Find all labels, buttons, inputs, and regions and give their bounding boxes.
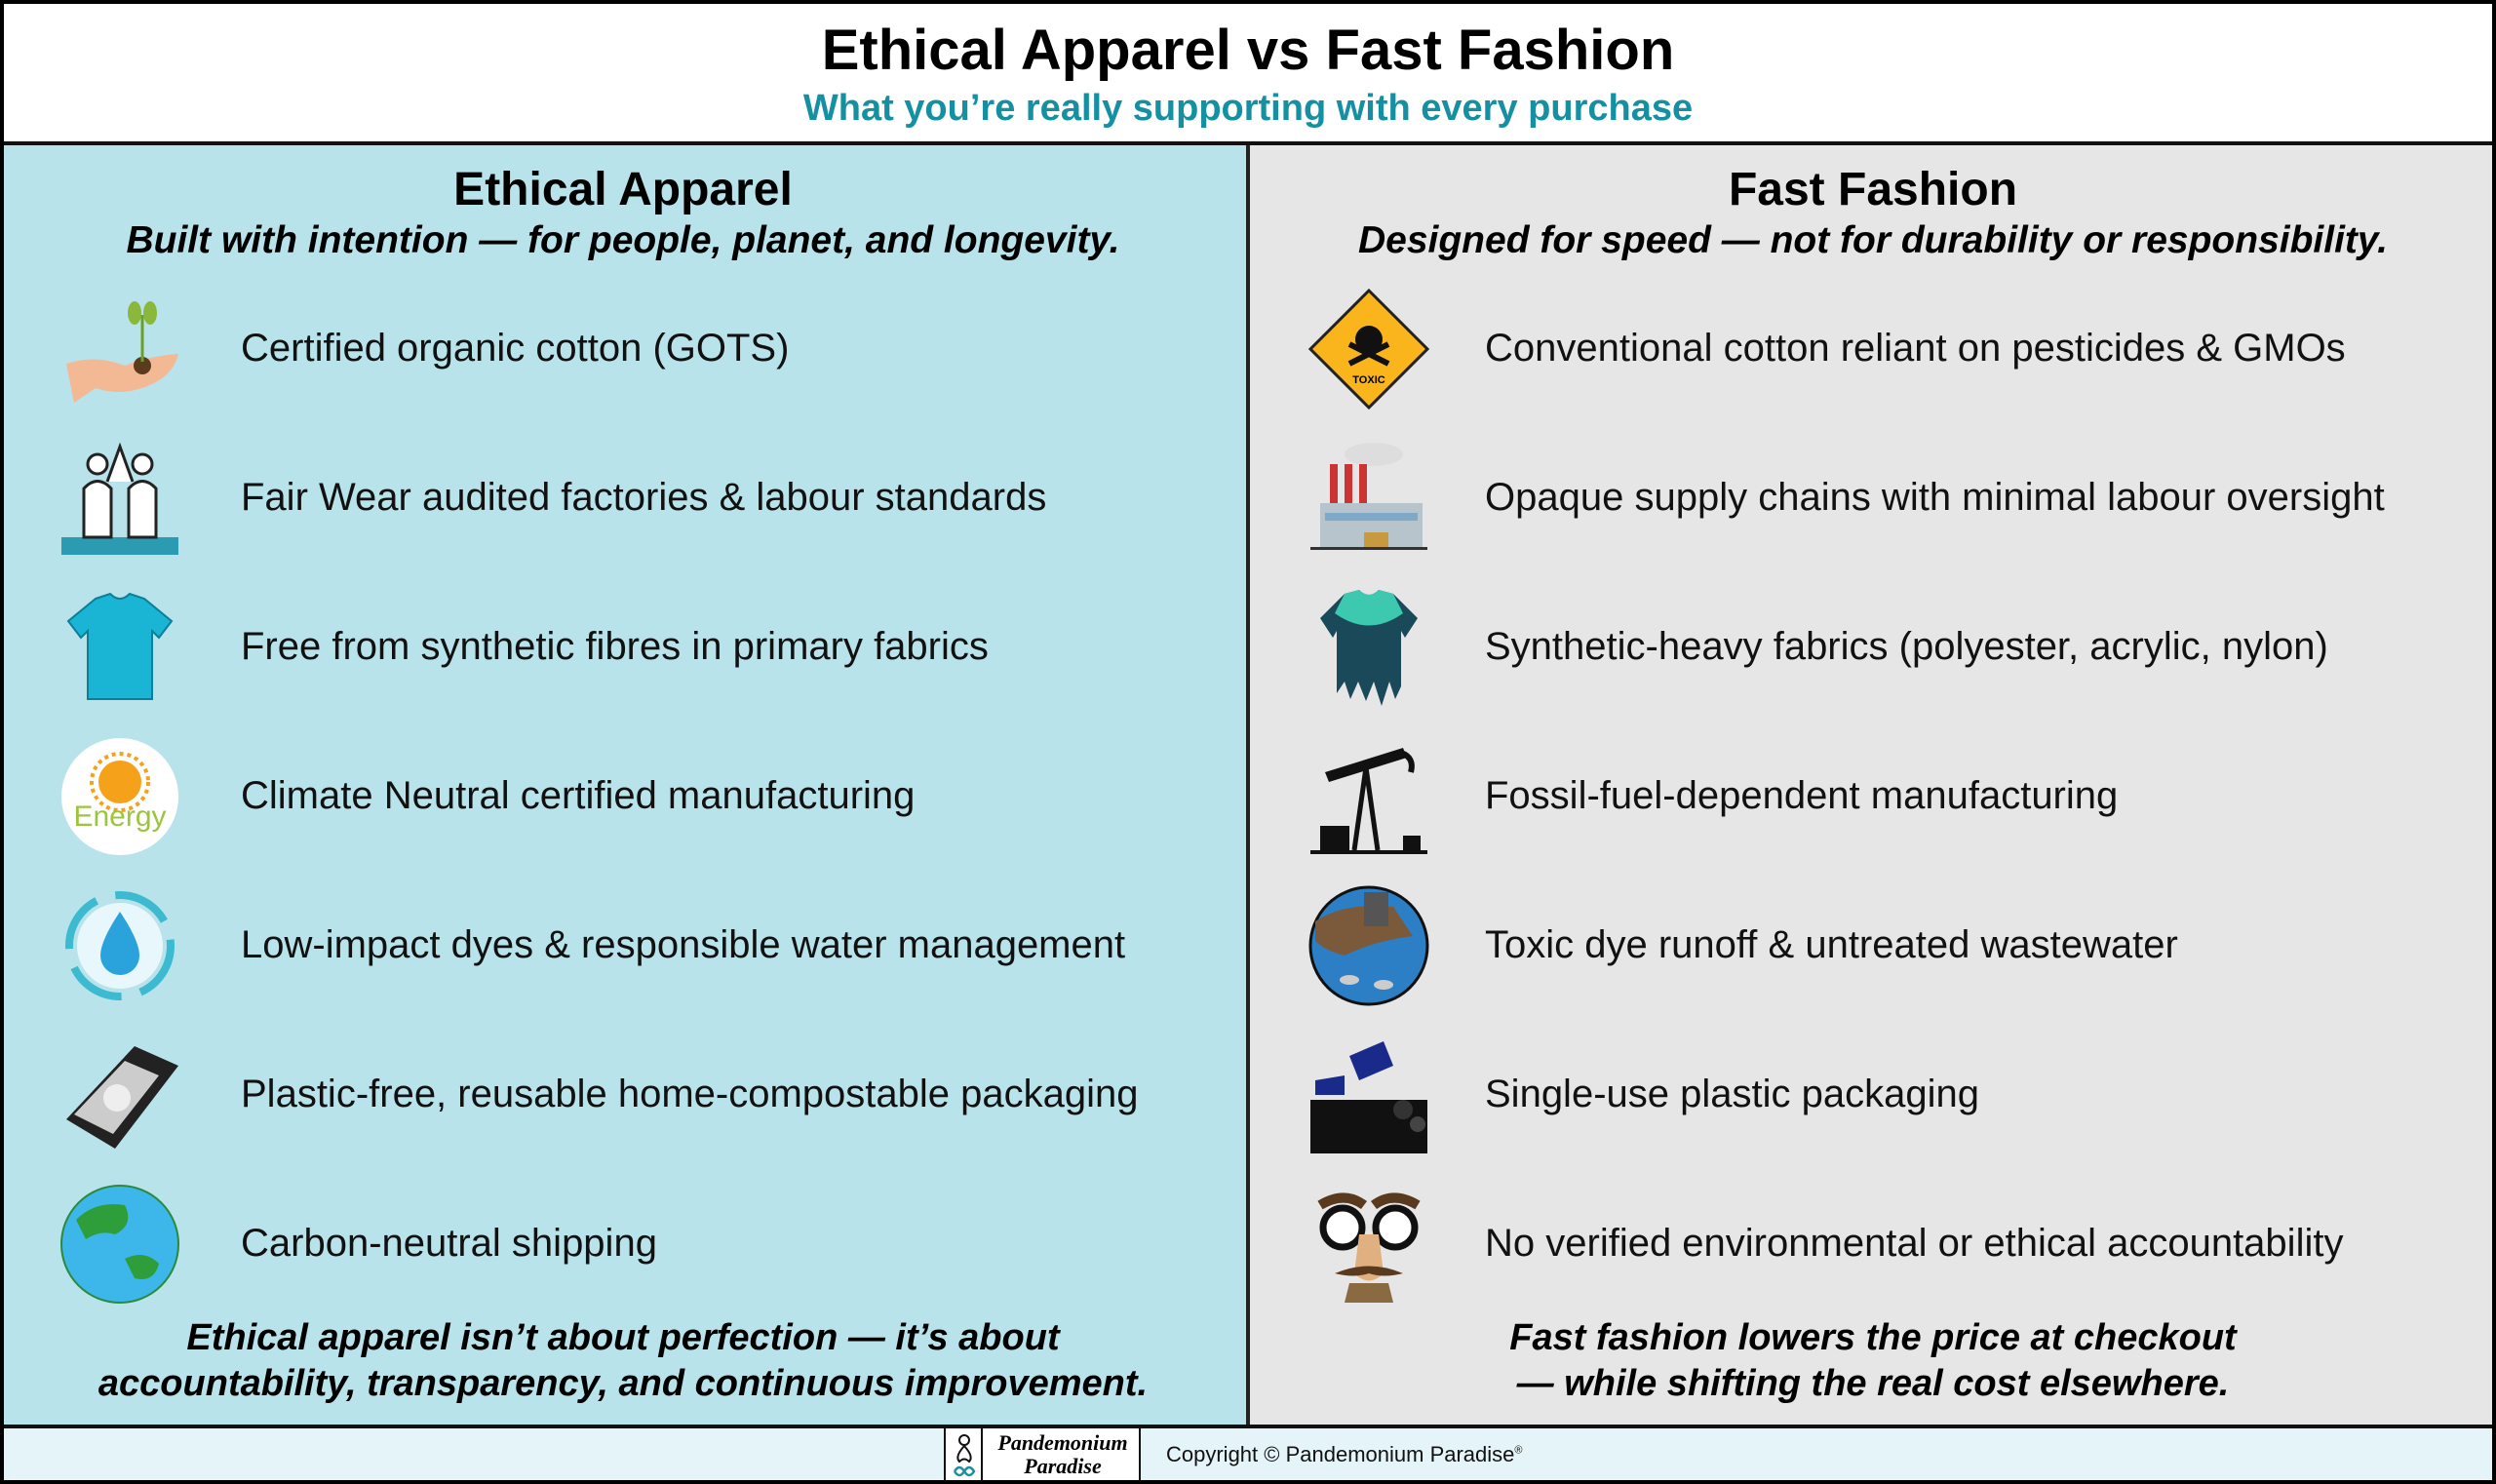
icon: polluted water: [1308, 885, 1429, 1006]
text: Carbon-neutral shipping: [241, 1222, 657, 1265]
icon: globe: [60, 1185, 179, 1304]
row: fossil fuel: [1310, 748, 2118, 854]
tagline: Built with intention — for people, planet, and longevity.: [126, 219, 1120, 261]
text: Conventional cotton reliant on pesticides & GMOs: [1485, 327, 2346, 370]
row: plastic packaging: [1310, 1041, 1979, 1153]
text: Free from synthetic fibres in primary fabrics: [241, 625, 989, 668]
copyright: Copyright © Pandemonium Paradise®: [1166, 1442, 1523, 1466]
panel: fast fashion: [1250, 145, 2496, 1425]
row: no synthetic: [66, 593, 989, 700]
logo: Paradise: [1024, 1454, 1102, 1478]
icon: energy sun: Energy: [73, 801, 167, 833]
row: organic cotton: [66, 301, 789, 403]
text: Fair Wear audited factories & labour standards: [241, 476, 1046, 519]
logo: Pandemonium: [997, 1430, 1128, 1455]
row: packaging: [66, 1046, 1139, 1149]
icon: package: [66, 1046, 178, 1149]
row: shipping: [60, 1185, 657, 1304]
text: Single-use plastic packaging: [1485, 1073, 1979, 1115]
text: Plastic-free, reusable home-compostable packaging: [241, 1073, 1139, 1115]
header: [0, 0, 2496, 145]
text: Synthetic-heavy fabrics (polyester, acrylic, nylon): [1485, 625, 2328, 668]
text: Fossil-fuel-dependent manufacturing: [1485, 774, 2118, 817]
text: Low-impact dyes & responsible water management: [241, 923, 1125, 966]
icon: disguise glasses: [1318, 1192, 1420, 1303]
text: Climate Neutral certified manufacturing: [241, 774, 915, 817]
row: water: [65, 891, 1125, 1000]
closing quote: accountability, transparency, and continuous improvement.: [98, 1363, 1148, 1404]
text: Certified organic cotton (GOTS): [241, 327, 789, 370]
text: Toxic dye runoff & untreated wastewater: [1485, 923, 2178, 966]
footer: [0, 1425, 2496, 1484]
closing quote: — while shifting the real cost elsewhere.: [1517, 1363, 2229, 1404]
heading: Ethical Apparel: [453, 164, 793, 215]
heading: Fast Fashion: [1729, 164, 2017, 215]
panel: ethical apparel: [0, 145, 1250, 1425]
subtitle: What you’re really supporting with every purchase: [803, 88, 1693, 129]
closing quote: [98, 1317, 1148, 1404]
closing quote: Ethical apparel isn’t about perfection — it’s about: [186, 1317, 1060, 1358]
row: synthetic: [1320, 590, 2328, 706]
row: climate neutral: [61, 738, 915, 855]
row: supply chains: [1310, 443, 2385, 550]
closing quote: [1509, 1317, 2238, 1404]
closing quote: Fast fashion lowers the price at checkout: [1509, 1317, 2237, 1358]
icon: hand with seedling: [66, 301, 178, 403]
text: Opaque supply chains with minimal labour oversight: [1485, 476, 2385, 519]
row: conventional cotton: [1308, 289, 2346, 410]
icon: energy sun: [61, 738, 178, 855]
row: dye runoff: [1308, 885, 2178, 1006]
icon: water drop: [65, 891, 175, 1000]
icon: factory: [1310, 443, 1427, 550]
icon: people: [61, 443, 178, 555]
icon: toxic sign: TOXIC: [1352, 374, 1385, 386]
row: fair wear: [61, 443, 1046, 555]
tagline: Designed for speed — not for durability or responsibility.: [1358, 219, 2388, 261]
title: Ethical Apparel vs Fast Fashion: [822, 19, 1674, 82]
icon: toxic sign: [1308, 289, 1429, 410]
row: accountability: [1318, 1192, 2344, 1303]
icon: oil pump: [1310, 748, 1427, 854]
icon: dump truck: [1310, 1041, 1427, 1153]
icon: t-shirt: [66, 593, 174, 700]
icon: dripping shirt: [1320, 590, 1418, 706]
logo: [944, 1428, 1141, 1484]
text: No verified environmental or ethical accountability: [1485, 1222, 2343, 1265]
